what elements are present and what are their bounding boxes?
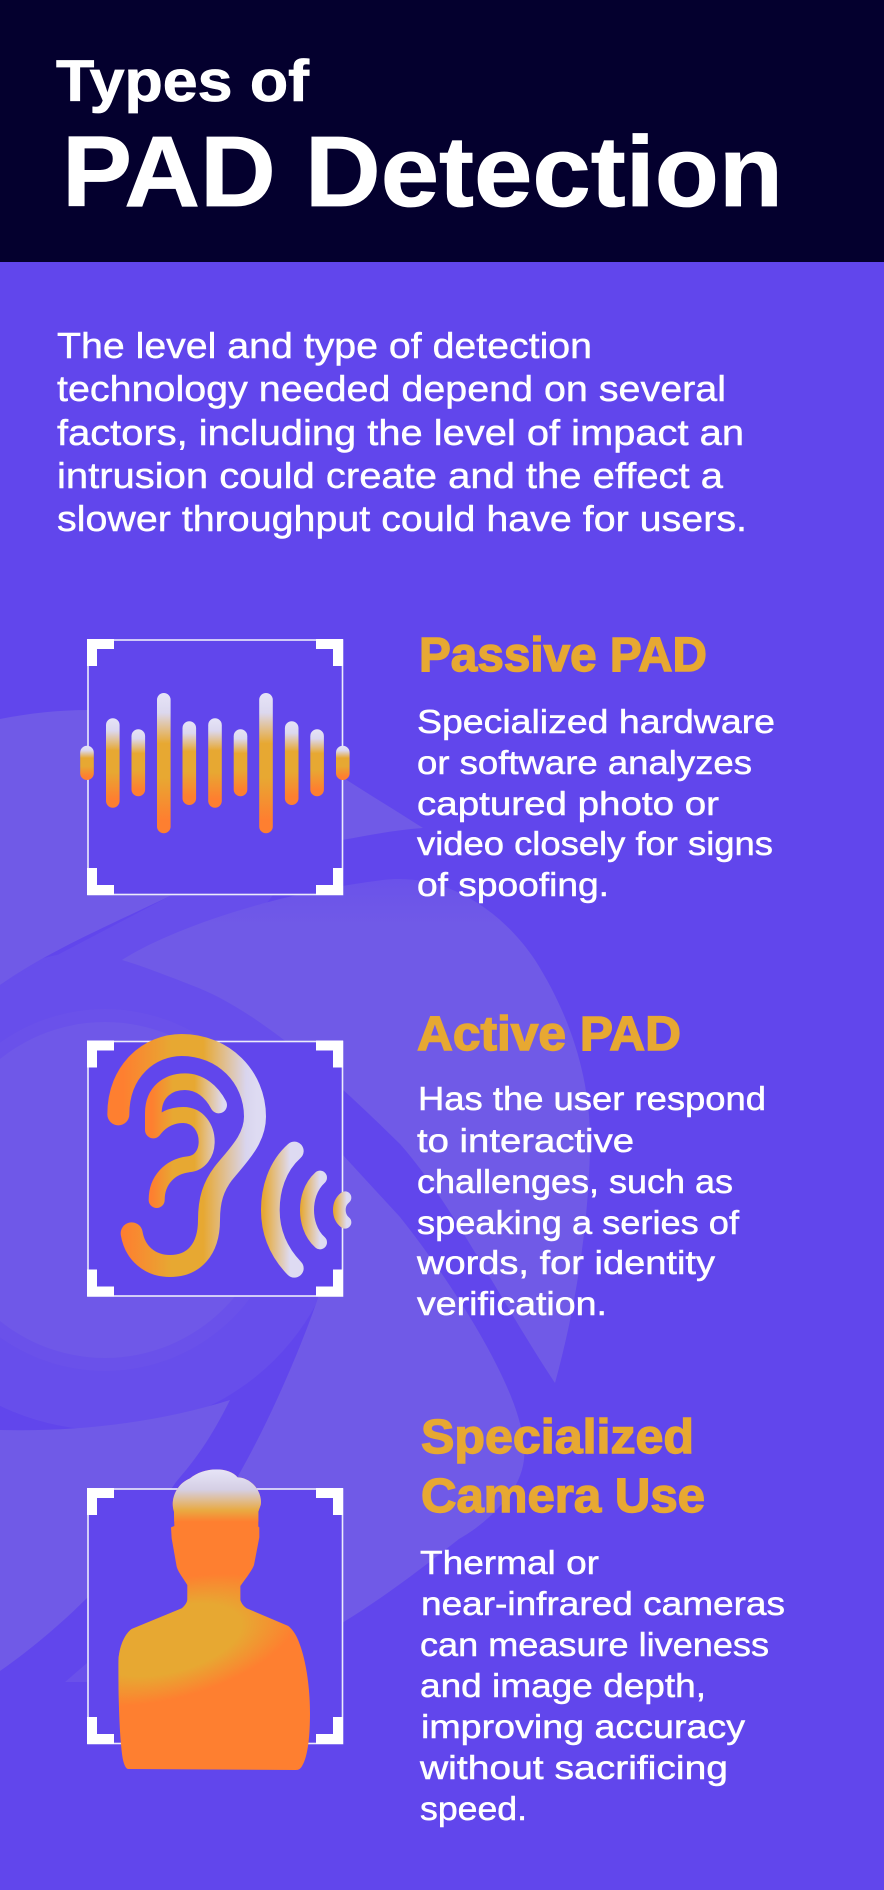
text: active description (416, 1081, 766, 1323)
text: specialized camera description: Thermal or (420, 1545, 599, 1582)
text: specialized camera description: speed. (420, 1791, 527, 1828)
text: active description: challenges, such as (417, 1164, 733, 1201)
intro paragraph: The level and type of detection (57, 325, 592, 366)
text: passive description: of spoofing. (417, 867, 609, 904)
intro paragraph: technology needed depend on several (57, 368, 726, 409)
intro paragraph (57, 325, 747, 539)
intro paragraph: factors, including the level of impact an (57, 412, 744, 453)
text: active description: to interactive (417, 1123, 634, 1160)
background swirl eye motif (0, 709, 590, 1682)
heading: Specialized Camera Use: Specialized (421, 1411, 694, 1464)
title (56, 49, 783, 228)
intro paragraph: slower throughput could have for users. (57, 498, 747, 539)
heading: Passive PAD: Passive PAD (419, 629, 707, 682)
text: passive description: or software analyzes (417, 745, 752, 782)
text: specialized camera description: near-infrared cameras (421, 1586, 785, 1623)
header band (0, 0, 884, 262)
heading: Active PAD: Active PAD (417, 1008, 681, 1061)
icon: ear with sound waves in scan frame (87, 1040, 345, 1296)
text: specialized camera description: improving accuracy (421, 1709, 745, 1746)
title: Types of (56, 49, 310, 114)
text: specialized camera description: can measure liveness (420, 1627, 769, 1664)
text: passive description (417, 704, 775, 904)
text: specialized camera description: and image depth, (420, 1668, 706, 1705)
heading: Specialized Camera Use (421, 1411, 705, 1523)
text: specialized camera description: without sacrificing (419, 1750, 728, 1787)
text: passive description: video closely for signs (417, 826, 773, 863)
text: active description: speaking a series of (417, 1205, 740, 1242)
panel: passive PAD (80, 629, 775, 904)
icon: person silhouette in scan frame (87, 1469, 344, 1770)
icon: sound wave in scan frame (80, 639, 350, 895)
panel: active PAD (87, 1008, 766, 1323)
text: passive description: Specialized hardware (417, 704, 775, 741)
text: active description: Has the user respond (418, 1081, 766, 1118)
text: active description: verification. (417, 1286, 607, 1323)
text: active description: words, for identity (416, 1245, 715, 1282)
intro paragraph: intrusion could create and the effect a (57, 455, 724, 496)
title: PAD Detection (62, 116, 783, 228)
text: passive description: captured photo or (417, 786, 719, 823)
text: specialized camera description (419, 1545, 785, 1828)
heading: Specialized Camera Use: Camera Use (421, 1470, 705, 1523)
panel: specialized camera use (26, 1411, 785, 1828)
